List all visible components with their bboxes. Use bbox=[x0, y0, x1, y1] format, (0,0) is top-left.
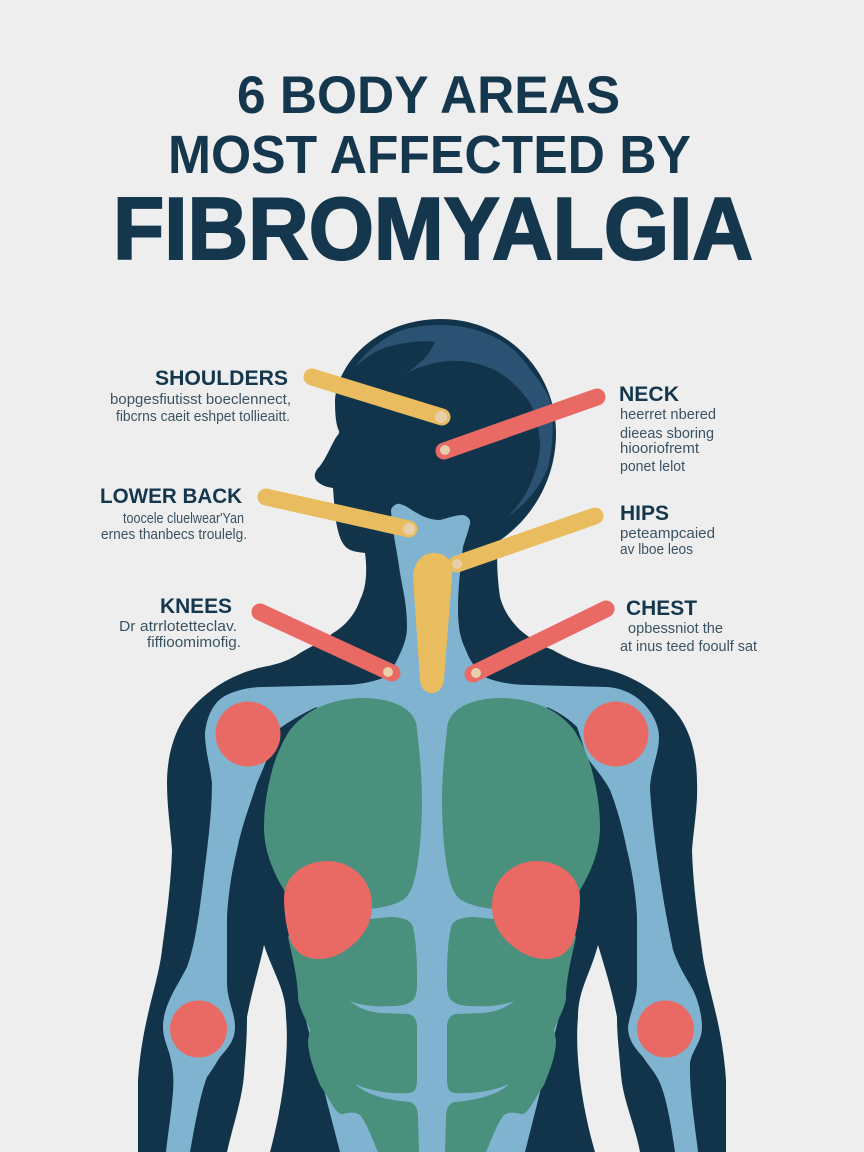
title bbox=[113, 66, 753, 278]
label: hips: av lboe leos bbox=[620, 542, 693, 558]
muscles: right chest bbox=[442, 698, 600, 909]
pointer: lower back bbox=[266, 497, 415, 535]
pointer: hips bbox=[452, 516, 595, 569]
label: lower back: ernes thanbecs troulelg. bbox=[101, 527, 247, 543]
yellow sternum bbox=[413, 553, 452, 693]
pointer: neck bbox=[440, 397, 597, 455]
label: neck: hiooriofremt bbox=[620, 441, 699, 457]
label: hips: peteampcaied bbox=[620, 526, 715, 542]
pointer: knees bbox=[260, 612, 393, 677]
skeleton: neck, collarbones, arms and torso bbox=[163, 504, 702, 1152]
label: knees: Dr atrrlotetteclav. bbox=[119, 619, 237, 635]
title: 6 BODY AREAS bbox=[237, 66, 620, 125]
label: hips: HIPS bbox=[620, 501, 669, 525]
label: neck: heerret nbered bbox=[620, 407, 716, 423]
label: chest bbox=[620, 596, 757, 655]
label: lower back bbox=[100, 484, 247, 543]
label: hips bbox=[620, 501, 715, 558]
muscles: left chest bbox=[264, 698, 422, 909]
title: FIBROMYALGIA bbox=[113, 179, 753, 278]
head highlight bbox=[355, 325, 553, 517]
pain point: right chest bbox=[492, 861, 580, 959]
muscles: right abdomen bbox=[445, 910, 576, 1152]
label: neck: dieeas sboring bbox=[620, 426, 714, 442]
pain point: left chest bbox=[284, 861, 372, 959]
body silhouette bbox=[138, 319, 726, 1152]
label: knees bbox=[119, 594, 241, 651]
muscles: left abdomen bbox=[288, 910, 419, 1152]
title: MOST AFFECTED BY bbox=[168, 125, 691, 185]
label: shoulders: SHOULDERS bbox=[155, 366, 288, 390]
pain point: left elbow bbox=[170, 1000, 227, 1058]
label: neck: NECK bbox=[619, 382, 679, 406]
label: chest: opbessniot the bbox=[628, 621, 723, 637]
pain point: right shoulder bbox=[584, 702, 648, 766]
label: knees: KNEES bbox=[160, 594, 232, 618]
label: chest: CHEST bbox=[626, 596, 697, 620]
label: chest: at inus teed fooulf sat bbox=[620, 639, 757, 655]
pain point: left shoulder bbox=[216, 702, 280, 766]
label: knees: fiffioomimofig. bbox=[147, 635, 241, 651]
pointer: shoulders bbox=[312, 377, 447, 423]
label: shoulders: fibcrns caeit eshpet tollieaitt. bbox=[116, 409, 290, 425]
label: neck: ponet lelot bbox=[620, 459, 685, 475]
label: shoulders bbox=[110, 366, 291, 425]
label: shoulders: bopgesfiutisst boeclennect, bbox=[110, 392, 291, 408]
pointer: chest bbox=[471, 609, 606, 678]
body illustration bbox=[138, 319, 726, 1152]
label: lower back: toocele cluelwear'Yan bbox=[123, 511, 244, 527]
label: lower back: LOWER BACK bbox=[100, 484, 242, 508]
pain point: right elbow bbox=[637, 1000, 694, 1058]
label: neck bbox=[619, 382, 716, 475]
